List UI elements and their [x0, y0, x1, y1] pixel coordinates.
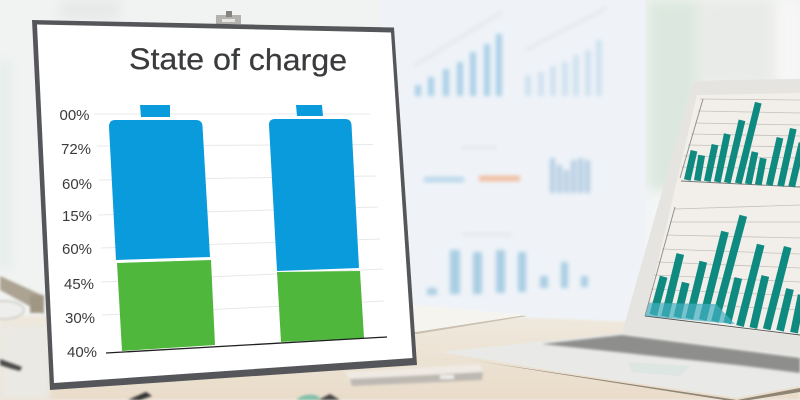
gridlines — [94, 114, 384, 315]
y axis labels: 15% — [62, 208, 92, 225]
board surface — [37, 24, 412, 383]
chart axes — [645, 99, 800, 335]
desk items left: notebook and pen — [0, 276, 44, 371]
teal reflection band — [645, 303, 735, 324]
phone on desk — [345, 364, 483, 386]
desk — [0, 312, 800, 400]
desk items bottom — [128, 392, 340, 400]
y axis labels: 40% — [67, 344, 97, 361]
baseline axis — [106, 337, 387, 353]
y axis labels: 30% — [65, 310, 95, 327]
lower bar chart — [653, 216, 800, 333]
y axis labels: 60% — [62, 241, 92, 258]
upper bar chart — [687, 103, 800, 187]
battery right terminal — [296, 105, 323, 116]
hanging clip — [216, 11, 241, 24]
y axis labels: 00% — [59, 107, 90, 124]
board frame — [32, 20, 417, 390]
wall poster with blurred charts — [380, 0, 645, 322]
title: State of charge — [129, 43, 347, 78]
presentation board — [32, 11, 417, 390]
battery left charge upper — [109, 120, 210, 260]
laptop lid — [622, 79, 800, 355]
laptop base — [440, 333, 800, 400]
laptop — [440, 79, 800, 400]
laptop screen — [645, 93, 800, 336]
keyboard — [542, 335, 800, 373]
battery right — [269, 105, 364, 342]
battery left — [109, 105, 215, 351]
y axis labels: 45% — [64, 276, 94, 293]
blurred charts — [414, 8, 606, 295]
battery left terminal — [140, 105, 170, 117]
battery right charge lower — [277, 271, 364, 342]
white paper on desk — [405, 304, 527, 334]
y axis labels: 72% — [61, 141, 91, 158]
chart gridlines — [648, 99, 800, 310]
battery left charge lower — [117, 260, 215, 351]
battery right charge upper — [269, 119, 359, 271]
y axis labels: 60% — [62, 176, 92, 193]
y axis labels — [59, 107, 97, 361]
